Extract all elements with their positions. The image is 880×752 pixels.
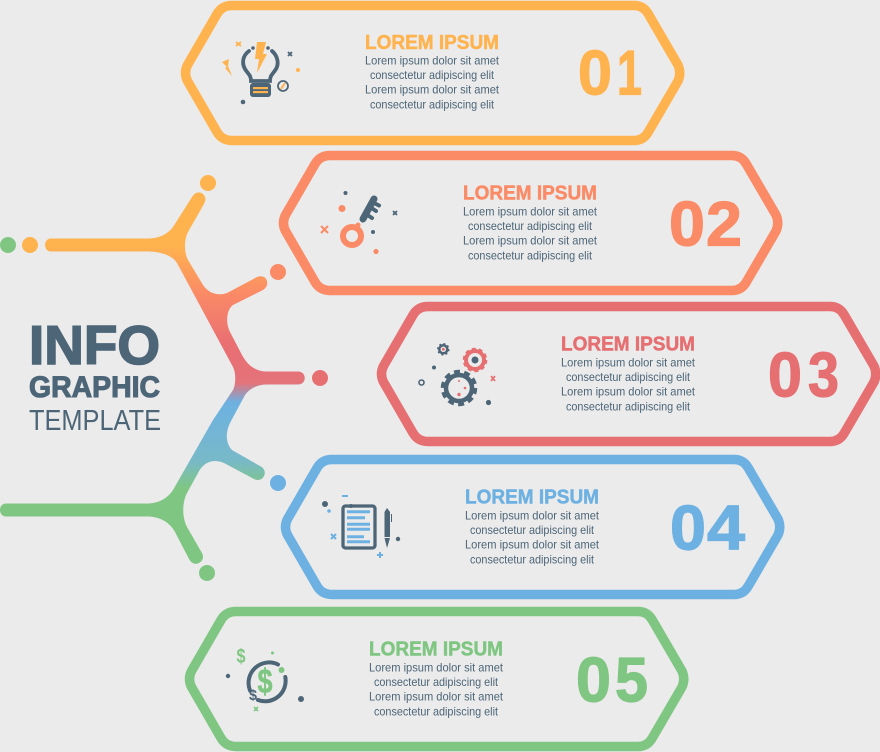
panel 4 body text: Lorem ipsum dolor sit amet xyxy=(465,508,600,522)
panel 1 body text: Lorem ipsum dolor sit amet xyxy=(365,54,500,68)
panel 5 number: 5 xyxy=(615,646,648,716)
panel 4 body text: consectetur adipiscing elit xyxy=(470,552,595,566)
icon: dollar cycle xyxy=(226,646,304,711)
panel 2 xyxy=(284,156,778,290)
panel 3 body text xyxy=(561,356,696,414)
panel 4 body text: consectetur adipiscing elit xyxy=(470,523,595,537)
panel 4 number xyxy=(670,494,745,564)
panel 5 frame xyxy=(190,612,684,746)
panel 2 heading: LOREM IPSUM xyxy=(463,182,597,204)
dot: branch 3 xyxy=(312,370,328,386)
title: TEMPLATE xyxy=(29,405,161,437)
panel 4 frame xyxy=(286,460,780,594)
panel 2 body text: consectetur adipiscing elit xyxy=(468,219,593,233)
panel 1 body text: consectetur adipiscing elit xyxy=(370,98,495,112)
icon: dollar cycle: $ xyxy=(236,646,246,668)
panel 1 number xyxy=(578,38,642,108)
title: GRAPHIC xyxy=(29,371,160,404)
panel 1 xyxy=(186,6,680,140)
panel 4 heading: LOREM IPSUM xyxy=(465,486,599,508)
panel 3 number: 3 xyxy=(808,340,839,410)
panel 5 number xyxy=(576,646,648,716)
panel 3 body text: consectetur adipiscing elit xyxy=(566,400,691,414)
title: INFO xyxy=(29,314,160,376)
dot: branch 5 xyxy=(199,565,215,581)
title xyxy=(29,314,161,437)
panel 5 heading: LOREM IPSUM xyxy=(369,638,503,660)
panel 1 body text: consectetur adipiscing elit xyxy=(370,68,495,82)
icon: document and pen xyxy=(322,496,400,558)
panel 1 body text xyxy=(365,54,500,112)
panel 2 body text: consectetur adipiscing elit xyxy=(468,248,593,262)
panel 2 body text: Lorem ipsum dolor sit amet xyxy=(463,234,598,248)
panel 4 number: 0 xyxy=(670,494,706,564)
panel 3 body text: consectetur adipiscing elit xyxy=(566,370,691,384)
icon: gears xyxy=(419,344,495,405)
dot: left orange xyxy=(22,237,38,253)
dot: branch 1 xyxy=(200,175,216,191)
panel 1 number: 1 xyxy=(617,38,642,108)
panel 4 xyxy=(286,460,780,594)
panel 4 body text: Lorem ipsum dolor sit amet xyxy=(465,538,600,552)
panel 5 body text: Lorem ipsum dolor sit amet xyxy=(369,690,504,704)
panel 4 number: 4 xyxy=(707,494,745,564)
panel 3 number xyxy=(768,340,839,410)
panel 1 heading: LOREM IPSUM xyxy=(365,31,499,54)
panel 1 number: 0 xyxy=(578,38,612,108)
icon: light bulb xyxy=(222,42,300,104)
panel 5 body text xyxy=(369,660,504,718)
panel 5 number: 0 xyxy=(576,646,611,716)
panel 5 body text: consectetur adipiscing elit xyxy=(374,675,499,689)
panel 5 xyxy=(190,612,684,746)
panel 2 frame xyxy=(284,156,778,290)
panel 2 number: 2 xyxy=(706,190,742,260)
panel 2 number xyxy=(669,190,742,260)
panel 1 body text: Lorem ipsum dolor sit amet xyxy=(365,82,500,96)
panel 2 body text xyxy=(463,204,598,262)
panel 4 body text xyxy=(465,508,600,566)
icon: dollar cycle: $ xyxy=(258,663,273,701)
panel 3 body text: Lorem ipsum dolor sit amet xyxy=(561,384,696,398)
panel 3 frame xyxy=(382,306,876,442)
dot: left green xyxy=(0,237,16,253)
dot: branch 4 xyxy=(270,475,286,491)
panel 3 xyxy=(382,306,876,442)
panel 3 heading: LOREM IPSUM xyxy=(561,332,695,356)
panel 2 body text: Lorem ipsum dolor sit amet xyxy=(463,204,598,218)
branching tree connector xyxy=(0,175,328,581)
panel 5 body text: consectetur adipiscing elit xyxy=(374,704,499,718)
icon: key xyxy=(321,191,397,254)
panel 5 body text: Lorem ipsum dolor sit amet xyxy=(369,660,504,674)
panel 3 number: 0 xyxy=(768,340,802,410)
panel 3 body text: Lorem ipsum dolor sit amet xyxy=(561,356,696,370)
dot: branch 2 xyxy=(270,264,286,280)
panel 1 frame xyxy=(186,6,680,140)
icon: dollar cycle: $ xyxy=(249,687,258,704)
panel 2 number: 0 xyxy=(669,190,705,260)
